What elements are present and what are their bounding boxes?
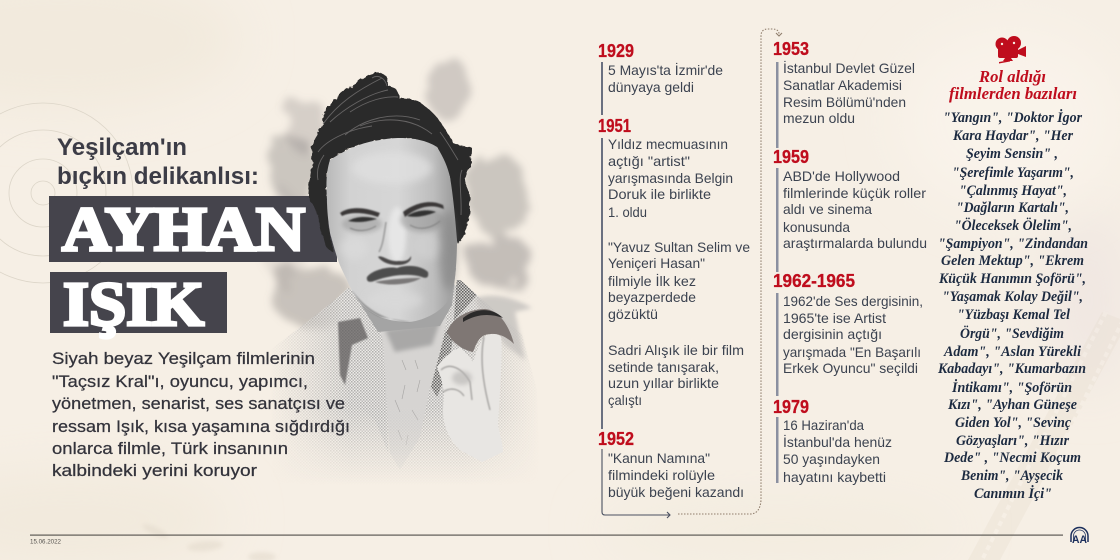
smoke behind portrait — [267, 58, 534, 325]
timeline: 1952: büyük beğeni kazandı — [608, 484, 744, 500]
timeline: 1952: 1952 — [598, 429, 634, 449]
neck — [358, 268, 456, 332]
timeline: 1953: Sanatlar Akademisi — [783, 77, 902, 93]
subtitle: Yeşilçam'ın — [57, 134, 187, 161]
name: Işık: IŞIK — [63, 271, 204, 339]
shirt collars — [338, 277, 477, 452]
timeline: 1951: setinde tanışarak, — [608, 359, 719, 375]
timeline: 1979: 16 Haziran'da — [783, 417, 864, 433]
film list: Dede" , "Necmi Koçum — [943, 450, 1081, 466]
timeline: 1953: 1953 — [773, 39, 809, 59]
timeline: 1929 — [598, 41, 723, 115]
timeline: 1952 — [598, 429, 744, 500]
chest skin — [380, 318, 447, 470]
timeline: 1951: uzun yıllar birlikte — [608, 375, 719, 391]
timeline: 1959: aldı ve sinema — [783, 201, 872, 217]
film list: "Öleceksek Ölelim", — [954, 217, 1072, 234]
intro paragraph: Siyah beyaz Yeşilçam filmlerinin — [52, 349, 315, 368]
film list: Küçük Hanımın Şoförü", — [938, 271, 1086, 287]
film list: İntikamı", "Şoförün — [951, 379, 1072, 396]
film list: Adam", "Aslan Yürekli — [943, 344, 1082, 360]
timeline: 1951: çalıştı — [608, 392, 642, 408]
timeline: 1979: 1979 — [773, 397, 809, 417]
intro paragraph: "Taçsız Kral"ı, oyuncu, yapımcı, — [52, 372, 308, 391]
film list: Giden Yol", "Sevinç — [955, 415, 1071, 431]
timeline: 1951: Doruk ile birlikte — [608, 186, 711, 202]
timeline: 1962-1965: 1962-1965 — [773, 271, 855, 291]
timeline: 1959: filmlerinde küçük roller — [783, 185, 926, 201]
timeline: 1959: 1959 — [773, 147, 809, 167]
mouth — [375, 278, 421, 285]
film list — [937, 109, 1088, 502]
hair strands — [317, 76, 462, 215]
heading: films: Rol aldığı — [978, 67, 1046, 86]
intro paragraph: ressam Işık, kısa yaşamına sığdırdığı — [52, 417, 350, 436]
icon: film camera — [996, 36, 1026, 64]
timeline: 1951: açtığı "artist" — [608, 153, 690, 169]
timeline connector arrow — [602, 29, 782, 518]
intro paragraph: kalbindeki yerini koruyor — [52, 461, 257, 480]
moustache — [367, 266, 428, 282]
timeline: 1979: İstanbul'da henüz — [783, 433, 892, 450]
nose — [378, 256, 411, 265]
timeline: 1951: 1. oldu — [608, 204, 647, 220]
timeline: 1951: Yıldız mecmuasının — [608, 136, 728, 152]
film list: "Yüzbaşı Kemal Tel — [957, 307, 1071, 323]
timeline: 1951: Sadri Alışık ile bir film — [608, 342, 744, 358]
film list: Kabadayı", "Kumarbazın — [937, 361, 1086, 377]
timeline: 1962-1965: Erkek Oyuncu" seçildi — [783, 360, 918, 376]
timeline: 1951: yarışmasında Belgin — [608, 170, 733, 186]
timeline: 1959: konusunda — [783, 219, 850, 235]
face light and shadow — [388, 207, 406, 263]
timeline: 1952: "Kanun Namına" — [608, 450, 710, 466]
film list: "Dağların Kartalı", — [956, 200, 1069, 216]
face — [326, 138, 457, 322]
timeline: 1951 — [598, 116, 750, 429]
timeline: 1929: 1929 — [598, 41, 634, 61]
concentric circles — [0, 103, 133, 283]
jacket over shoulder — [475, 296, 532, 360]
intro paragraph: onlarca filmle, Türk insanının — [52, 439, 288, 458]
film list: "Yangın", "Doktor İgor — [943, 109, 1082, 126]
logo: AA: AA — [1072, 534, 1087, 546]
decorative film strip — [968, 312, 1120, 560]
timeline: 1952: filmindeki rolüyle — [608, 467, 715, 483]
hand — [437, 334, 503, 462]
timeline: 1953: mezun oldu — [783, 110, 855, 126]
timeline: 1979: 50 yaşındayken — [783, 451, 880, 467]
timeline: 1959 — [773, 147, 927, 272]
timeline: 1959: ABD'de Hollywood — [783, 168, 900, 184]
timeline: 1953 — [773, 39, 915, 148]
timeline: 1962-1965 — [773, 271, 923, 396]
film list: Gelen Mektup", "Ekrem — [941, 253, 1084, 269]
timeline: 1953: İstanbul Devlet Güzel — [783, 59, 915, 76]
timeline: 1951: Yeniçeri Hasan" — [608, 255, 705, 271]
brows — [340, 208, 380, 217]
footer rule — [30, 534, 1063, 536]
film list: Kara Haydar", "Her — [952, 128, 1073, 144]
forehead highlight — [352, 152, 432, 184]
timeline: 1929: dünyaya geldi — [608, 79, 694, 95]
timeline: 1962-1965: 1965'te ise Artist — [783, 310, 886, 326]
timeline: 1979 — [773, 397, 892, 485]
name: Ayhan: AYHAN — [62, 196, 305, 264]
logo: AA — [1071, 528, 1088, 546]
heading: films — [949, 67, 1077, 103]
subtitle — [57, 134, 259, 190]
timeline: 1951: beyazperdede — [608, 289, 696, 305]
film list: Canımın İçi" — [974, 485, 1052, 502]
eyes — [348, 217, 377, 222]
date: 15.06.2022 — [30, 538, 61, 546]
film list: "Çalınmış Hayat", — [959, 183, 1067, 199]
film list: "Şampiyon", "Zindandan — [938, 236, 1088, 252]
timeline: 1979: hayatını kaybetti — [783, 469, 886, 485]
shirt and shoulders — [280, 284, 530, 476]
timeline: 1962-1965: yarışmada "En Başarılı — [783, 344, 921, 360]
portrait — [280, 72, 531, 476]
subtitle: bıçkın delikanlısı: — [57, 163, 259, 190]
film list: "Şerefimle Yaşarım", — [952, 165, 1074, 181]
timeline: 1953: Resim Bölümü'nden — [783, 94, 906, 110]
timeline: 1951: 1951 — [598, 116, 631, 136]
film list: Örgü", "Sevdiğim — [960, 325, 1064, 342]
heading: films: filmlerden bazıları — [949, 84, 1077, 103]
intro paragraph — [52, 349, 350, 480]
timeline: 1951: filmiyle İlk kez — [608, 272, 696, 289]
film list: Gözyaşları", "Hızır — [956, 433, 1069, 449]
timeline: 1962-1965: 1962'de Ses dergisinin, — [783, 293, 923, 309]
film list: Şeyim Sensin" , — [966, 146, 1058, 162]
timeline: 1951: "Yavuz Sultan Selim ve — [608, 239, 750, 255]
intro paragraph: yönetmen, senarist, ses sanatçısı ve — [52, 394, 345, 413]
timeline: 1929: 5 Mayıs'ta İzmir'de — [608, 61, 723, 78]
timeline: 1959: araştırmalarda bulundu — [783, 235, 927, 251]
name box: Ayhan — [49, 196, 337, 262]
timeline: 1951: gözüktü — [608, 306, 658, 322]
film list: "Yaşamak Kolay Değil", — [942, 289, 1083, 305]
film list: Benim", "Ayşecik — [960, 468, 1063, 484]
film list: Kızı", "Ayhan Güneşe — [947, 397, 1077, 413]
hair — [308, 73, 472, 253]
timeline: 1962-1965: dergisinin açtığı — [783, 326, 882, 342]
